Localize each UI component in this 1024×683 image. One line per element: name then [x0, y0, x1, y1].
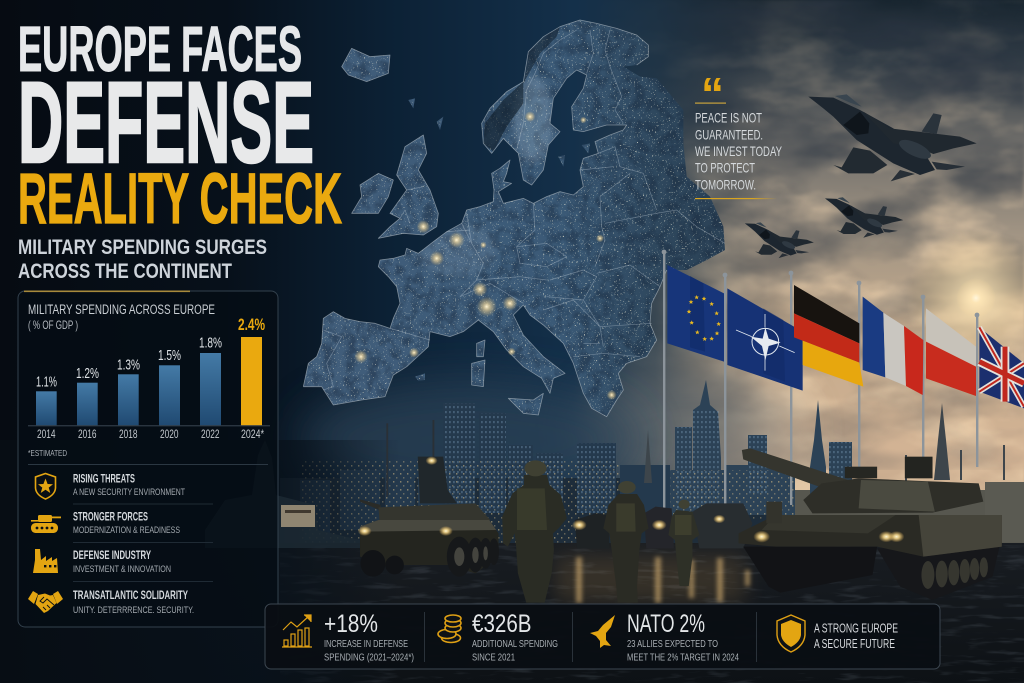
flag: France [863, 297, 923, 395]
flag: European Union [667, 265, 724, 362]
icon: shield star [36, 474, 56, 499]
tank tracks [743, 547, 877, 593]
stat: NATO 2%: NATO 2% [627, 610, 705, 638]
dark storm clouds [684, 2, 1024, 470]
bar chart: 2014 [37, 429, 56, 441]
item: defense industry: INVESTMENT & INNOVATION [73, 564, 171, 575]
icon: handshake [28, 591, 63, 613]
bar chart: 2018 [119, 429, 138, 441]
background vehicles [572, 503, 752, 548]
stat: €326B: SINCE 2021 [472, 653, 515, 664]
quote: WE INVEST TODAY [695, 143, 782, 159]
flag: United Kingdom [979, 327, 1024, 408]
icon: tank [31, 515, 61, 533]
stat: €326B: €326B [472, 610, 532, 638]
item: rising threats: RISING THREATS [73, 474, 135, 486]
armored vehicle [358, 420, 499, 577]
flags [667, 265, 1024, 408]
stat: +18%: SPENDING (2021–2024*) [324, 653, 414, 664]
panel: military spending and drivers [18, 290, 278, 627]
stat: NATO 2% [627, 610, 739, 664]
icon: growth chart [282, 615, 312, 647]
soldier: rear [668, 500, 699, 586]
city light hot spots [354, 111, 617, 400]
subtitle [18, 236, 267, 283]
stat: €326B [472, 610, 558, 664]
battle tank [739, 448, 1002, 600]
gun barrel [742, 448, 859, 498]
item: defense industry: DEFENSE INDUSTRY [73, 550, 151, 562]
lower left haze over city [300, 380, 640, 500]
item: transatlantic solidarity: TRANSATLANTIC SOLIDARITY [73, 590, 188, 602]
item: rising threats [73, 474, 185, 498]
bar chart: 2024* [241, 429, 264, 441]
road wheels [921, 557, 988, 589]
flag: NATO [727, 288, 803, 391]
footnote: *ESTIMATED [28, 448, 67, 458]
sunlit clouds [678, 0, 1024, 490]
bar chart: 2016 [78, 429, 96, 441]
flag: Germany [794, 285, 863, 387]
stat: +18%: INCREASE IN DEFENSE [324, 639, 408, 650]
title [18, 13, 342, 239]
icon: shield [777, 615, 805, 652]
item: transatlantic solidarity [73, 590, 194, 616]
coast outlines [303, 20, 667, 417]
bar chart: 2022 [201, 429, 220, 441]
slogan: A SECURE FUTURE [814, 637, 895, 651]
stats bar [265, 604, 940, 669]
icon: factory [33, 549, 58, 573]
item: stronger forces: STRONGER FORCES [73, 512, 148, 524]
slogan: A STRONG EUROPE [814, 622, 898, 636]
wet ground [0, 543, 1024, 683]
quote: TOMORROW. [695, 176, 756, 192]
icon: quotation marks: “ [701, 68, 724, 120]
turret [803, 478, 983, 513]
left shadow over ground [0, 440, 400, 683]
item: rising threats: A NEW SECURITY ENVIRONMENT [73, 487, 185, 498]
soldier: middle [603, 481, 649, 603]
bar chart: 1.1% [36, 374, 57, 390]
bar chart: 2.4% [238, 315, 265, 334]
national borders [323, 30, 725, 390]
map of Europe [303, 20, 725, 417]
warship silhouette [205, 440, 360, 548]
stat: €326B: ADDITIONAL SPENDING [472, 639, 558, 650]
stat: +18%: +18% [324, 610, 378, 638]
grey haze behind flags [580, 370, 800, 490]
bar chart: 2020 [160, 429, 178, 441]
icon: jet [590, 615, 615, 648]
bar chart [28, 315, 270, 441]
jet: left wing [745, 222, 814, 258]
soldier: front [502, 460, 567, 603]
bar chart: 1.8% [199, 336, 222, 352]
flag poles [662, 250, 979, 510]
jet: right wing [825, 197, 903, 238]
stat: NATO 2%: MEET THE 2% TARGET IN 2024 [627, 653, 739, 664]
flag: Poland [926, 308, 976, 396]
title line 1: EUROPE FACES [18, 13, 302, 85]
soldiers [502, 460, 699, 603]
chart heading: MILITARY SPENDING ACROSS EUROPE [28, 302, 215, 317]
city skyline [280, 380, 1024, 555]
jet: lead [808, 94, 977, 181]
chart unit: ( % OF GDP ) [28, 318, 78, 332]
icon: coins [438, 615, 461, 642]
quote: PEACE IS NOT [695, 110, 762, 126]
quote [695, 68, 782, 199]
quote: GUARANTEED. [695, 126, 763, 142]
stat: +18% [324, 610, 414, 664]
sun glow [906, 228, 1024, 368]
title line 2: DEFENSE [18, 59, 314, 187]
item: stronger forces [73, 512, 180, 536]
quote: TO PROTECT [695, 160, 755, 176]
land masses [304, 20, 725, 416]
subtitle: MILITARY SPENDING SURGES [18, 236, 267, 259]
fighter jets [745, 94, 977, 258]
stat: NATO 2%: 23 ALLIES EXPECTED TO [627, 639, 718, 650]
item: stronger forces: MODERNIZATION & READINESS [73, 525, 180, 536]
hull [739, 515, 1002, 557]
bar chart: 1.3% [117, 358, 140, 374]
slogan [814, 622, 898, 651]
bar chart: 1.5% [158, 348, 181, 364]
item: transatlantic solidarity: UNITY. DETERRRENCE. SECURITY. [73, 605, 194, 616]
bar chart: 1.2% [76, 366, 99, 382]
item: defense industry [73, 550, 171, 575]
subtitle: ACROSS THE CONTINENT [18, 260, 232, 283]
title line 3: REALITY CHECK [18, 160, 342, 239]
